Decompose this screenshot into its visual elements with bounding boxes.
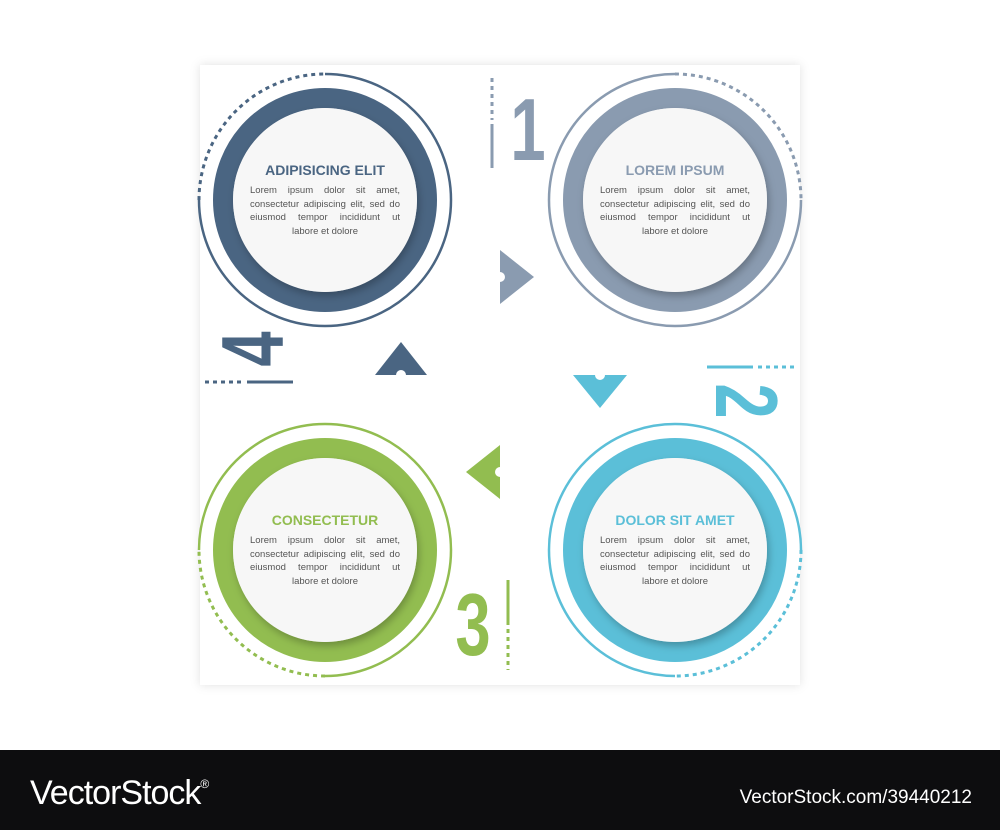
footer bar <box>0 750 1000 830</box>
arrow: down <box>573 370 627 408</box>
text: dolor sit amet: Lorem ipsum dolor sit amet, consectetur adipiscing elit, sed do eiusmod tempor incididunt ut labore et dolore <box>600 535 750 586</box>
number 4 <box>205 331 303 382</box>
text: adipisicing elit: Lorem ipsum dolor sit amet, consectetur adipiscing elit, sed do eiusmod tempor incididunt ut labore et dolore <box>250 185 400 236</box>
panels <box>200 65 800 685</box>
number 2 <box>696 367 796 419</box>
text: lorem ipsum: Lorem ipsum dolor sit amet, consectetur adipiscing elit, sed do eiusmod tempor incididunt ut labore et dolore <box>600 185 750 236</box>
text: lorem ipsum <box>600 162 750 236</box>
arrow: up <box>375 342 427 380</box>
footer bar: ® <box>200 777 209 791</box>
arrow: left <box>466 445 505 499</box>
footer bar: VectorStock.com/39440212 <box>740 787 972 808</box>
number 4: 4 <box>205 331 303 367</box>
text: dolor sit amet <box>600 512 750 586</box>
step 1 circle: lorem ipsum <box>549 74 801 326</box>
number 1: 1 <box>510 82 546 180</box>
text: consectetur <box>250 512 400 586</box>
text: consectetur: CONSECTETUR <box>272 512 378 528</box>
step 3 circle: consectetur <box>199 424 451 676</box>
text: adipisicing elit: ADIPISICING ELIT <box>265 162 385 178</box>
text: consectetur: Lorem ipsum dolor sit amet, consectetur adipiscing elit, sed do eiusmod tempor incididunt ut labore et dolore <box>250 535 400 586</box>
text: adipisicing elit <box>250 162 400 236</box>
number 2: 2 <box>696 383 794 419</box>
step 2 circle: dolor sit amet <box>549 424 801 676</box>
arrow: right <box>495 250 534 304</box>
text: dolor sit amet: DOLOR SIT AMET <box>615 512 735 528</box>
footer bar: VectorStock <box>30 774 200 812</box>
number 1 <box>492 78 546 180</box>
text: lorem ipsum: LOREM IPSUM <box>626 162 724 178</box>
step 4 circle: adipisicing elit <box>199 74 451 326</box>
number 3 <box>455 577 508 675</box>
number 3: 3 <box>455 577 491 675</box>
